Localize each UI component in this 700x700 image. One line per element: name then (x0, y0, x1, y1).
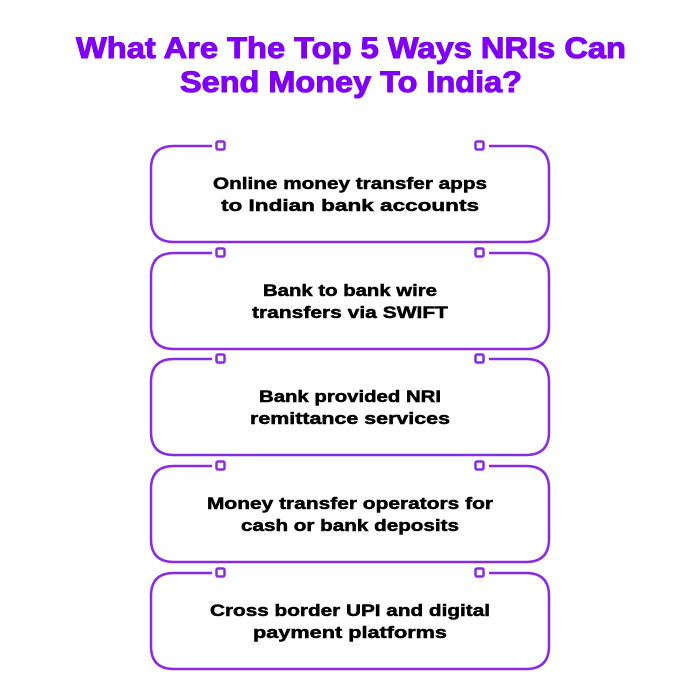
panel: item 1: Online money transfer apps (213, 174, 487, 193)
panel: item 1: to Indian bank accounts (221, 196, 479, 215)
panel: item 5: Cross border UPI and digital (210, 601, 490, 620)
panel: item 1 (151, 142, 549, 242)
panel: item 4: cash or bank deposits (241, 516, 459, 535)
panel: item 2: transfers via SWIFT (252, 303, 449, 322)
title (76, 32, 626, 99)
title: What Are The Top 5 Ways NRIs Can (76, 32, 626, 65)
title: Send Money To India? (180, 66, 522, 99)
panel: item 3: Bank provided NRI (259, 387, 441, 406)
panel: item 2: Bank to bank wire (263, 281, 437, 300)
panel: item 4: Money transfer operators for (207, 494, 493, 513)
panel: item 3: remittance services (250, 409, 450, 428)
panel: item 2 (151, 248, 549, 349)
panel: item 5: payment platforms (253, 623, 447, 642)
panel: item 3 (151, 354, 549, 455)
panel: item 4 (151, 462, 549, 562)
panel: item 5 (151, 568, 549, 669)
